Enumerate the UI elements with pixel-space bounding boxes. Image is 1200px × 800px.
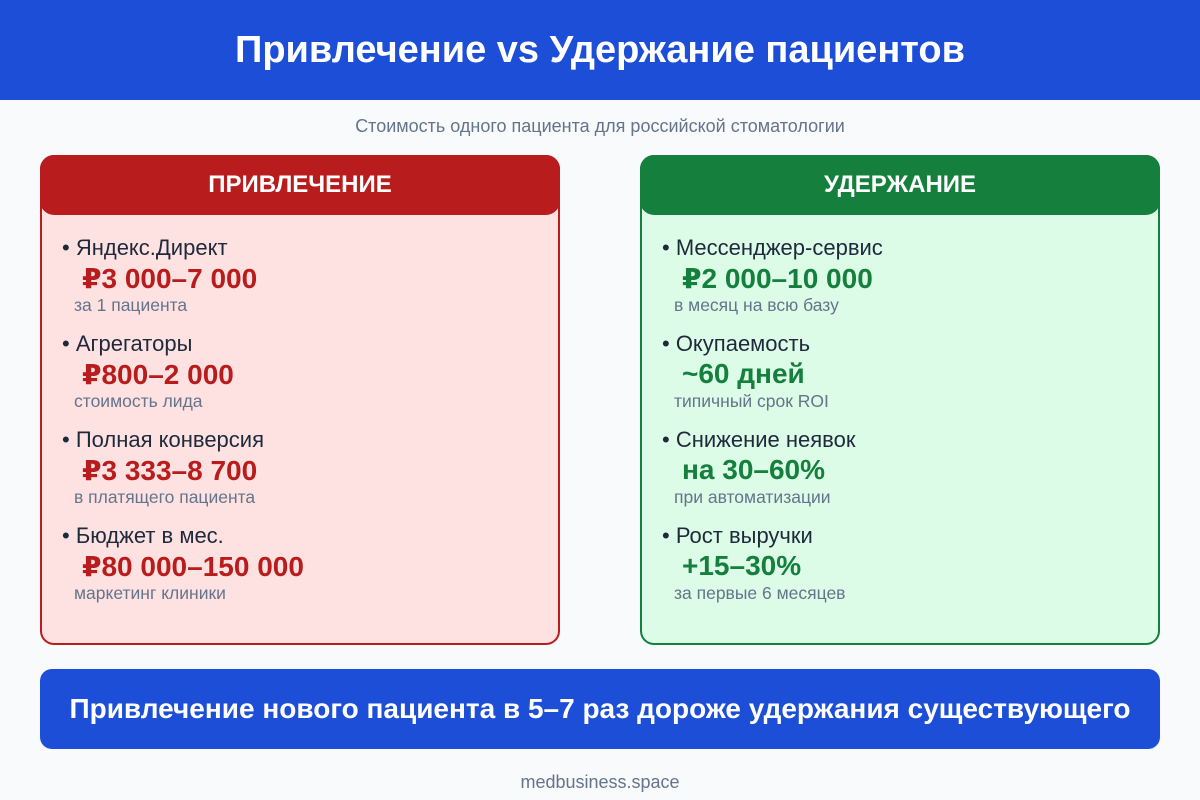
item: budget <box>62 523 304 603</box>
panel heading: acquisition: ПРИВЛЕЧЕНИЕ <box>208 171 392 198</box>
item: no-shows <box>662 427 856 507</box>
item: aggregators: ₽800–2 000 <box>82 359 234 390</box>
item: revenue: за первые 6 месяцев <box>674 583 845 603</box>
item: full conversion <box>62 427 264 507</box>
item: yandex direct: за 1 пациента <box>74 295 187 315</box>
item: yandex direct <box>62 235 257 315</box>
item: full conversion: • Полная конверсия <box>62 427 264 452</box>
footer: medbusiness.space <box>520 772 680 792</box>
panel: retention <box>640 155 1160 645</box>
conclusion banner: Привлечение нового пациента в 5–7 раз дороже удержания существующего <box>69 693 1131 724</box>
item: revenue: • Рост выручки <box>662 523 813 548</box>
item: no-shows: • Снижение неявок <box>662 427 855 452</box>
title <box>0 0 1200 100</box>
item: messenger <box>662 235 883 315</box>
item: payback <box>662 331 829 411</box>
title: Привлечение vs Удержание пациентов <box>235 29 965 71</box>
item: full conversion: ₽3 333–8 700 <box>82 455 257 486</box>
item: budget: маркетинг клиники <box>74 583 226 603</box>
panel heading: retention: УДЕРЖАНИЕ <box>824 171 976 198</box>
panel: acquisition <box>40 155 560 645</box>
item: messenger: в месяц на всю базу <box>674 295 839 315</box>
item: aggregators: • Агрегаторы <box>62 331 192 356</box>
item: messenger: ₽2 000–10 000 <box>682 263 873 294</box>
item: messenger: • Мессенджер-сервис <box>662 235 883 260</box>
item: aggregators <box>62 331 234 411</box>
item: budget: • Бюджет в мес. <box>62 523 224 548</box>
panel heading: retention <box>640 155 1160 215</box>
item: aggregators: стоимость лида <box>74 391 203 411</box>
item: payback: типичный срок ROI <box>674 391 829 411</box>
item: revenue: +15–30% <box>682 550 801 581</box>
item: yandex direct: ₽3 000–7 000 <box>82 263 257 294</box>
subtitle: Стоимость одного пациента для российской стоматологии <box>355 116 845 136</box>
item: revenue <box>662 523 845 603</box>
conclusion banner <box>40 669 1160 749</box>
item: full conversion: в платящего пациента <box>74 487 255 507</box>
item: payback: ~60 дней <box>682 358 805 389</box>
item: no-shows: на 30–60% <box>682 454 825 485</box>
item: yandex direct: • Яндекс.Директ <box>62 235 228 260</box>
panel heading: acquisition <box>40 155 560 215</box>
item: payback: • Окупаемость <box>662 331 810 356</box>
item: no-shows: при автоматизации <box>674 487 831 507</box>
item: budget: ₽80 000–150 000 <box>82 551 304 582</box>
